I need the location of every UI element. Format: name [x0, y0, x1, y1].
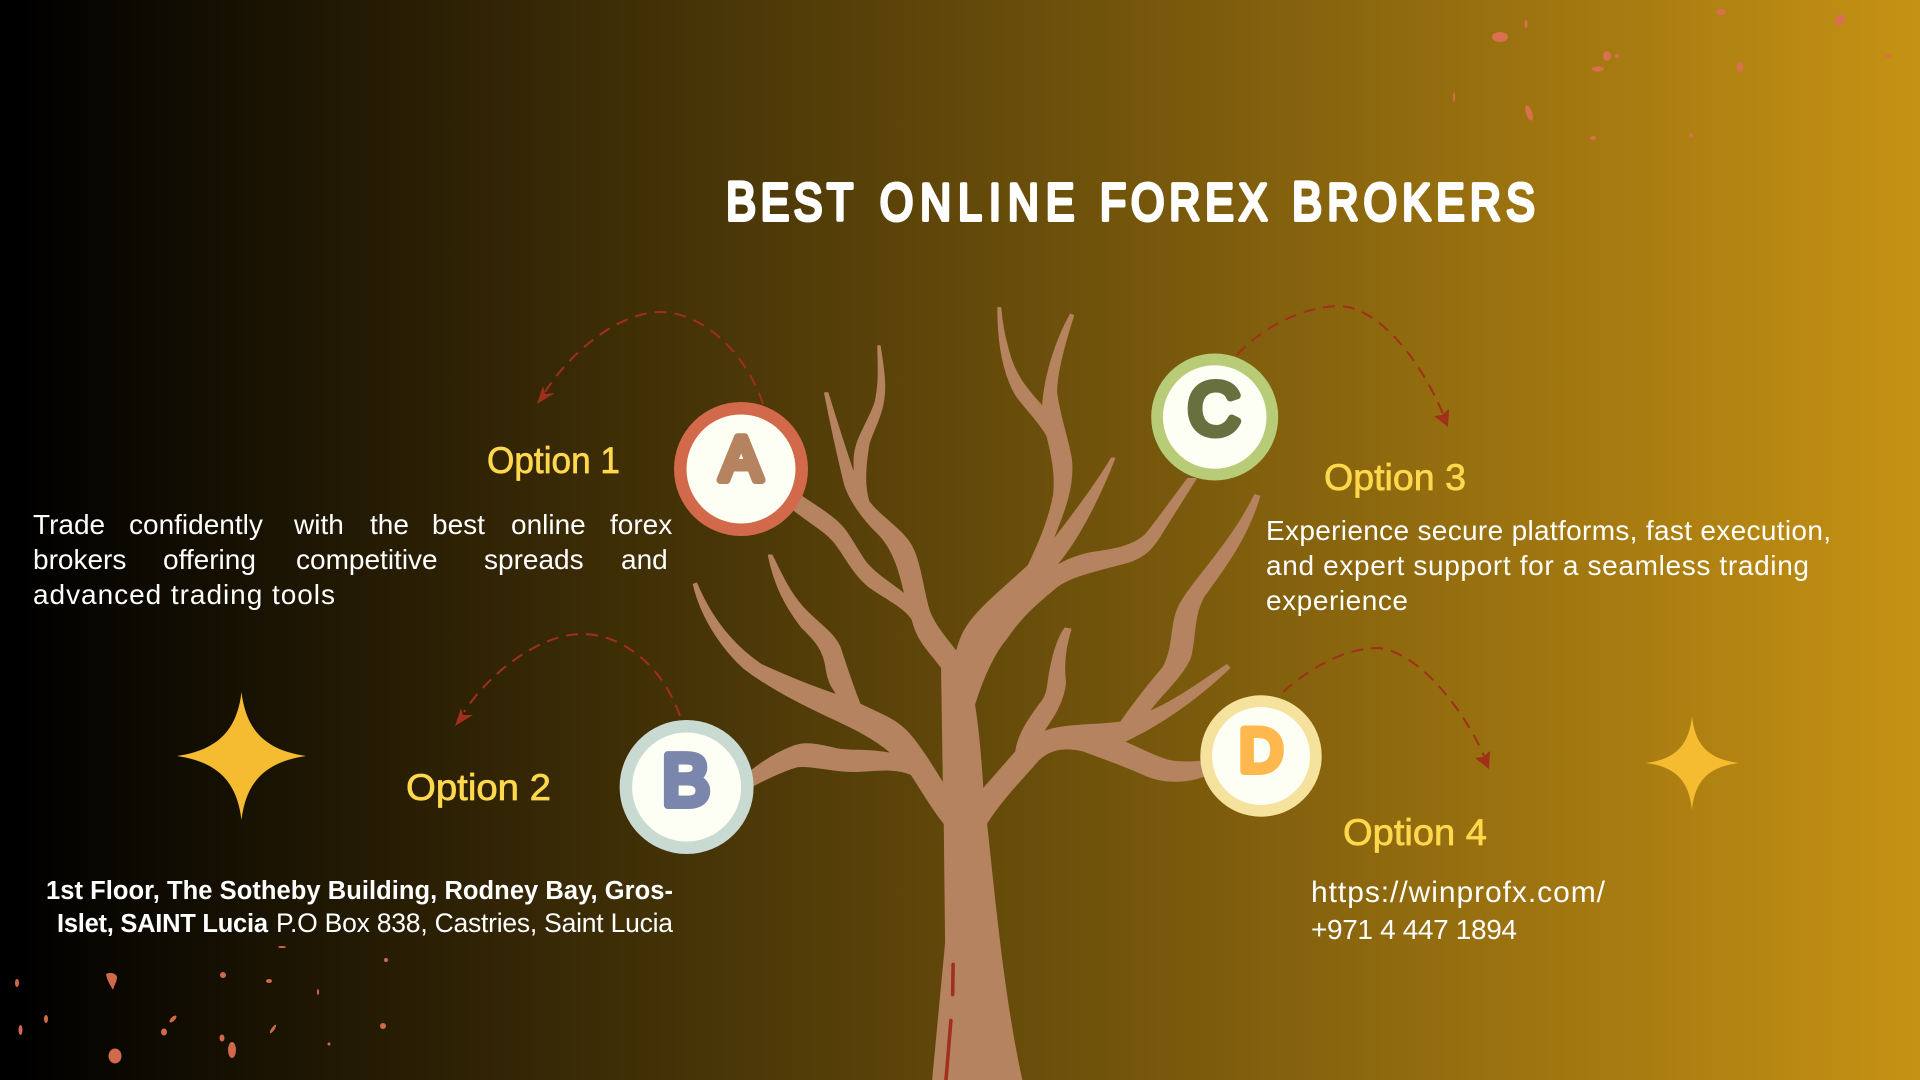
option C: circle badge: C	[1188, 370, 1240, 450]
title	[726, 170, 1535, 232]
arrow: option 3	[1237, 306, 1449, 427]
text: option 3 description: Experience secure platforms, fast execution,	[1266, 515, 1831, 546]
text: option 3 description: and expert support for a seamless trading	[1266, 550, 1809, 581]
text: option 2 address: P.O Box 838, Castries, Saint Lucia	[276, 908, 673, 938]
title: BROKERS	[1292, 170, 1535, 232]
heading: option 3: Option 3	[1324, 457, 1466, 498]
arrow: option 1	[537, 312, 763, 404]
heading: option 2: Option 2	[406, 767, 551, 808]
text: option 2 address	[46, 877, 673, 938]
text: option 1 description: confidently	[129, 509, 263, 540]
text: option 1 description: spreads	[484, 544, 584, 575]
text: option 1 description	[33, 509, 672, 610]
text: option 1 description: advanced trading tools	[33, 579, 335, 610]
text: option 1 description: Trade	[33, 509, 105, 540]
option A: circle badge	[674, 402, 808, 536]
text: option 1 description: and	[621, 544, 668, 575]
text: option 1 description: best	[432, 509, 485, 540]
star: left	[177, 692, 306, 820]
text: option 4 contact: https://winprofx.com/	[1311, 876, 1606, 909]
text: option 1 description: the	[370, 509, 409, 540]
splatter: bottom left	[15, 946, 388, 1064]
text: option 1 description: offering	[163, 544, 256, 575]
title: FOREX	[1100, 174, 1267, 232]
splatter: top right	[1453, 9, 1891, 140]
option D: circle badge: D	[1239, 717, 1283, 784]
text: option 2 address: 1st Floor, The Sotheby Building, Rodney Bay, Gros-	[46, 877, 673, 905]
text: option 1 description: competitive	[296, 544, 438, 575]
arrow: option 2	[455, 634, 680, 726]
text: option 3 description: experience	[1266, 585, 1408, 616]
text: option 1 description: online	[511, 509, 586, 540]
text: option 1 description: with	[293, 509, 344, 540]
star: right	[1646, 716, 1739, 810]
text: option 4 contact: +971 4 447 1894	[1311, 914, 1517, 945]
title: ONLINE	[880, 174, 1074, 232]
text: option 4 contact	[1311, 876, 1606, 945]
option B: circle badge: B	[662, 741, 710, 821]
arrow: option 4	[1283, 648, 1490, 769]
text: option 1 description: forex	[610, 509, 672, 540]
text: option 2 address: Islet, SAINT Lucia	[57, 910, 269, 938]
text: option 3 description	[1266, 515, 1831, 616]
heading: option 1: Option 1	[487, 440, 620, 481]
option D: circle badge	[1200, 695, 1322, 817]
title: BEST	[726, 170, 853, 232]
text: option 1 description: brokers	[33, 544, 126, 575]
tree illustration	[694, 308, 1259, 1080]
option C: circle badge	[1151, 354, 1278, 480]
option B: circle badge	[620, 720, 754, 854]
heading: option 4: Option 4	[1343, 812, 1487, 853]
option A: circle badge: A	[720, 425, 762, 494]
